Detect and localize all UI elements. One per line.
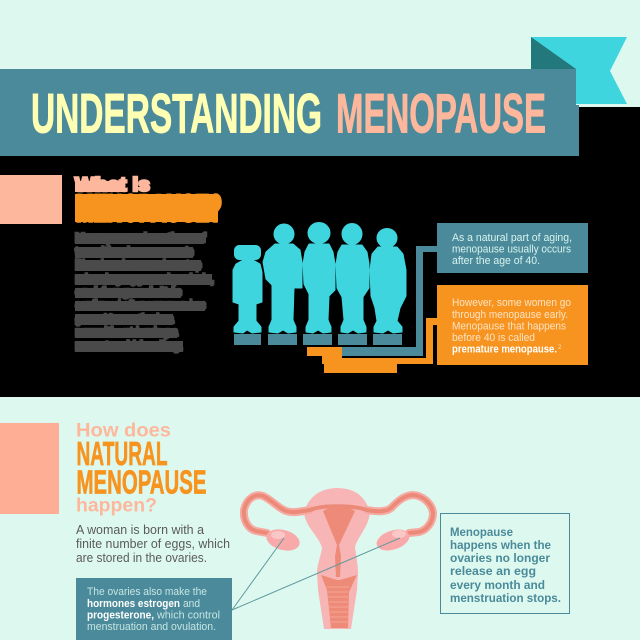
heading: how does natural menopause happen: NATURAL — [76, 435, 168, 472]
callout: premature menopause: However, some women go — [452, 297, 571, 309]
text block: menopause definition: end for good. It is — [75, 285, 182, 299]
figure 3 — [303, 222, 335, 333]
heading: how does natural menopause happen: How does — [76, 420, 171, 442]
callout: hormones: which control — [156, 610, 220, 622]
text block: menopause definition: releasing eggs and periods, — [75, 272, 214, 286]
callout: premature menopause: 2 — [558, 345, 562, 351]
fallopian tubes — [244, 495, 433, 533]
title banner — [0, 69, 579, 156]
heading: what is menopause — [75, 175, 222, 229]
heading: how does natural menopause happen: MENOPAUSE — [76, 464, 206, 500]
arrow: teal connector to natural menopause callout — [342, 246, 437, 356]
chart: base blocks under silhouettes — [234, 334, 402, 345]
callout: hormones: The ovaries also make the — [87, 586, 207, 598]
callout: premature menopause: Menopause that happens — [452, 320, 566, 332]
panel: what is menopause accent block — [0, 175, 62, 224]
callout: premature menopause: through menopause early. — [452, 309, 568, 321]
figure 1 — [233, 246, 262, 333]
callout: premature menopause: premature menopause. — [452, 344, 557, 356]
text block: menopause definition: gone 12 months in a — [75, 312, 175, 326]
callout: premature menopause: before 40 is called — [452, 332, 535, 344]
callout: menopause definition — [440, 514, 570, 614]
callout: hormones: menstruation and ovulation. — [87, 621, 216, 633]
text block: menopause definition: confirmed after a woman has — [75, 298, 206, 312]
callout: menopause definition: ovaries no longer — [450, 553, 551, 565]
illustration: female reproductive system — [244, 488, 433, 629]
heading: what is menopause: MENOPAUSE? — [76, 188, 222, 229]
text block: finite eggs — [76, 522, 230, 565]
callout lines from hormones box to ovaries — [232, 538, 400, 610]
callout: hormones: and — [183, 598, 200, 610]
ovaries — [264, 526, 302, 554]
text block: menopause definition: row without having a — [75, 325, 179, 339]
chart: row of five women silhouettes — [233, 222, 406, 333]
callout: natural age: menopause usually occurs — [452, 244, 571, 256]
title: UNDERSTANDING — [31, 82, 322, 144]
callout: menopause definition: happens when the — [450, 540, 551, 552]
callout: menopause definition: Menopause — [450, 527, 513, 539]
text block: menopause definition: Menopause is a time of — [75, 231, 207, 245]
callout: menopause definition: release an egg — [450, 566, 536, 578]
callout: menopause definition: menstruation stops. — [450, 593, 561, 605]
callout: menopause definition: every month and — [450, 580, 545, 592]
vaginal ribs — [327, 587, 349, 622]
heading: how does natural menopause happen — [76, 420, 206, 516]
callout: natural age: after the age of 40. — [452, 255, 540, 267]
text block: menopause definition: life when her ovaries stop — [75, 258, 202, 272]
uterine cavity and cervix — [323, 506, 355, 577]
panel: black upper section — [0, 107, 640, 397]
vaginal canal — [321, 575, 357, 628]
callout: hormones: hormones estrogen — [87, 598, 180, 610]
heading: what is menopause: What is — [75, 175, 150, 196]
text block: menopause definition: menstrual bleeding. — [75, 339, 183, 353]
panel: natural menopause accent block — [0, 423, 59, 514]
callout: hormones: progesterone, — [87, 610, 154, 622]
figure 2 — [263, 224, 302, 333]
text block: finite eggs: finite number of eggs, which — [76, 536, 230, 551]
uterus outer body — [304, 488, 370, 629]
callout: premature menopause — [437, 285, 588, 365]
callout: hormones — [76, 578, 232, 640]
text block: finite eggs: are stored in the ovaries. — [76, 550, 207, 565]
callout: natural age: As a natural part of aging, — [452, 232, 572, 244]
figure 5 — [370, 228, 406, 333]
arrow: orange connector to premature menopause callout — [307, 318, 437, 373]
callout: natural age — [437, 223, 588, 273]
text block: finite eggs: A woman is born with a — [76, 522, 205, 537]
text block: menopause definition: transition in a woman's — [75, 245, 194, 259]
icon: ribbon tail — [531, 37, 627, 104]
text block: menopause definition — [75, 231, 214, 353]
heading: how does natural menopause happen: happen? — [76, 496, 157, 516]
figure 4 — [336, 224, 369, 333]
